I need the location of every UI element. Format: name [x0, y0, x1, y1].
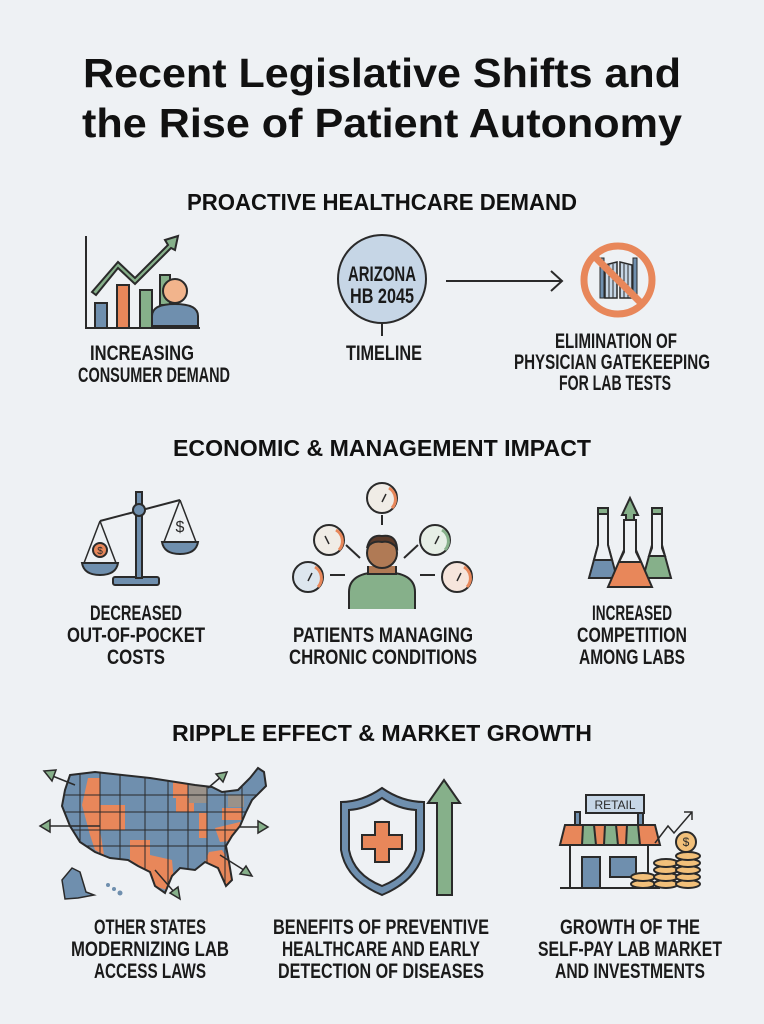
- label: other states modernizing: OTHER STATES: [94, 916, 206, 939]
- title: the Rise of Patient Autonomy: [82, 100, 682, 146]
- icon: us map with arrows: [40, 760, 270, 900]
- icon: scale: $: [97, 546, 103, 557]
- label: growth of self-pay lab market: GROWTH OF THE: [560, 916, 700, 939]
- icon: arizona hb 2045 timeline circle: HB 2045: [350, 285, 414, 308]
- icon: shield with cross and arrow: [341, 780, 460, 895]
- icon: flasks with arrow: [589, 498, 671, 587]
- label: other states modernizing: [71, 916, 229, 983]
- label: patients managing chronic conditions: [289, 624, 477, 669]
- icon: patient with gauges: [293, 483, 472, 609]
- icon: retail store with coins: $: [683, 835, 690, 849]
- icon: no gatekeeping: [584, 246, 652, 314]
- label: increasing consumer demand: [78, 342, 230, 387]
- label: increased competition among labs: [577, 602, 687, 669]
- label: patients managing chronic conditions: CHRONIC CONDITIONS: [289, 646, 477, 669]
- label: patients managing chronic conditions: PATIENTS MANAGING: [293, 624, 473, 647]
- label: other states modernizing: ACCESS LAWS: [94, 960, 206, 983]
- label: growth of self-pay lab market: AND INVESTMENTS: [555, 960, 705, 983]
- label: decreased out-of-pocket costs: COSTS: [107, 646, 165, 669]
- label: increased competition among labs: COMPETITION: [577, 624, 687, 647]
- label: elimination of physician gatekeeping: [514, 330, 710, 395]
- icon: retail store with coins: RETAIL: [594, 798, 636, 812]
- label: increasing consumer demand: CONSUMER DEMAND: [78, 364, 230, 387]
- title: [82, 50, 682, 146]
- label: growth of self-pay lab market: [538, 916, 722, 983]
- label: benefits of preventive healthcare: HEALTHCARE AND EARLY: [282, 938, 480, 961]
- label: decreased out-of-pocket costs: DECREASED: [90, 602, 182, 625]
- title: Recent Legislative Shifts and: [83, 50, 681, 96]
- label: increased competition among labs: AMONG LABS: [579, 646, 685, 669]
- label: benefits of preventive healthcare: BENEFITS OF PREVENTIVE: [273, 916, 489, 939]
- label: elimination of physician gatekeeping: FOR LAB TESTS: [559, 372, 671, 395]
- label: other states modernizing: MODERNIZING LAB: [71, 938, 229, 961]
- heading: economic & management impact: ECONOMIC & MANAGEMENT IMPACT: [173, 435, 591, 461]
- icon: scale: [82, 492, 198, 585]
- label: timeline: TIMELINE: [346, 342, 422, 365]
- label: decreased out-of-pocket costs: OUT-OF-POCKET: [67, 624, 205, 647]
- icon: arizona hb 2045 timeline circle: ARIZONA: [348, 263, 416, 286]
- label: decreased out-of-pocket costs: [67, 602, 205, 669]
- label: elimination of physician gatekeeping: ELIMINATION OF: [555, 330, 677, 353]
- heading: ripple effect & market growth: RIPPLE EFFECT & MARKET GROWTH: [172, 720, 592, 746]
- icon: arizona hb 2045 timeline circle: [338, 235, 426, 336]
- label: benefits of preventive healthcare: DETECTION OF DISEASES: [278, 960, 484, 983]
- arrow: [446, 271, 562, 291]
- label: increased competition among labs: INCREASED: [592, 602, 672, 625]
- icon: scale: $: [176, 519, 185, 536]
- icon: retail store with coins: [560, 795, 700, 888]
- label: increasing consumer demand: INCREASING: [90, 342, 194, 365]
- heading: proactive healthcare demand: PROACTIVE HEALTHCARE DEMAND: [187, 189, 577, 215]
- icon: chart with person: [86, 236, 200, 328]
- label: benefits of preventive healthcare: [273, 916, 489, 983]
